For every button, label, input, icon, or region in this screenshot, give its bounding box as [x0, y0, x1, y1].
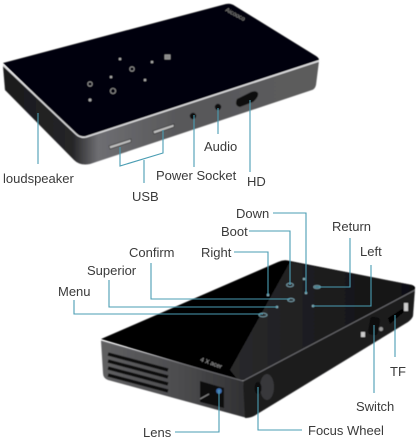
TF slot	[388, 309, 405, 324]
callout: Power Socket	[156, 115, 237, 183]
callout: HD: HD	[247, 174, 266, 189]
callout: Switch	[356, 325, 394, 414]
callout: Boot	[221, 224, 290, 285]
lens blue glint	[216, 388, 222, 394]
lens reflection	[200, 394, 209, 399]
callout: Menu: Menu	[58, 284, 91, 299]
callout: Lens	[143, 390, 219, 440]
callout: Focus Wheel: Focus Wheel	[308, 423, 384, 438]
callout: Menu	[58, 284, 263, 314]
callout: Down	[236, 206, 306, 293]
callout: Focus Wheel	[258, 387, 384, 438]
callout: Return	[315, 219, 371, 287]
callout: TF	[390, 315, 406, 379]
callout: Down: Down	[236, 206, 269, 221]
callout: Superior: Superior	[87, 263, 137, 278]
callout: Superior	[87, 263, 277, 307]
switch icon	[361, 332, 365, 337]
callout: Audio: Audio	[204, 139, 237, 154]
bottom projector device	[101, 260, 415, 418]
top device side faces	[3, 61, 319, 164]
TF icon	[404, 303, 408, 311]
callout: Right	[201, 245, 268, 295]
brand logo on top device: Aicooco	[224, 7, 246, 23]
focus wheel recess	[254, 382, 262, 394]
touch icons on bottom device	[259, 278, 320, 317]
callout: loudspeaker	[3, 113, 74, 186]
USB port 2	[153, 124, 174, 134]
switch slot	[368, 316, 380, 336]
touch icons on top device	[88, 55, 170, 101]
top device silver edge	[3, 61, 319, 137]
lens window	[200, 381, 224, 408]
callout: TF: TF	[390, 364, 406, 379]
ventilation slots	[108, 354, 168, 391]
brand on bottom device: 4 X acer	[199, 357, 222, 371]
callout: Right: Right	[201, 245, 232, 260]
focus wheel	[260, 374, 274, 400]
bottom device front face	[101, 341, 247, 418]
callout: USB	[120, 130, 163, 204]
top projector device	[3, 4, 319, 164]
switch light	[379, 327, 383, 331]
USB port 1	[109, 139, 131, 149]
callout: Lens: Lens	[143, 425, 172, 440]
callout: Left: Left	[360, 244, 382, 259]
callout: Return: Return	[332, 219, 371, 234]
callout: Boot: Boot	[221, 224, 248, 239]
audio jack	[215, 104, 221, 110]
bottom device right face	[243, 289, 415, 418]
callout: Confirm	[129, 245, 290, 299]
callout: loudspeaker: loudspeaker	[3, 171, 74, 186]
callout: Power Socket: Power Socket	[156, 168, 237, 183]
bottom device glossy top	[101, 260, 415, 380]
callout: Switch: Switch	[356, 399, 394, 414]
callout: Left	[313, 244, 382, 306]
callout: USB: USB	[132, 189, 159, 204]
glossy diagonal highlight	[230, 262, 414, 380]
callout: Audio	[204, 108, 237, 154]
top edge highlight	[101, 290, 415, 381]
HD port	[236, 91, 258, 107]
power socket	[190, 113, 196, 119]
top device glossy top face	[3, 4, 319, 137]
callout: HD	[247, 100, 266, 189]
callout: Confirm: Confirm	[129, 245, 175, 260]
